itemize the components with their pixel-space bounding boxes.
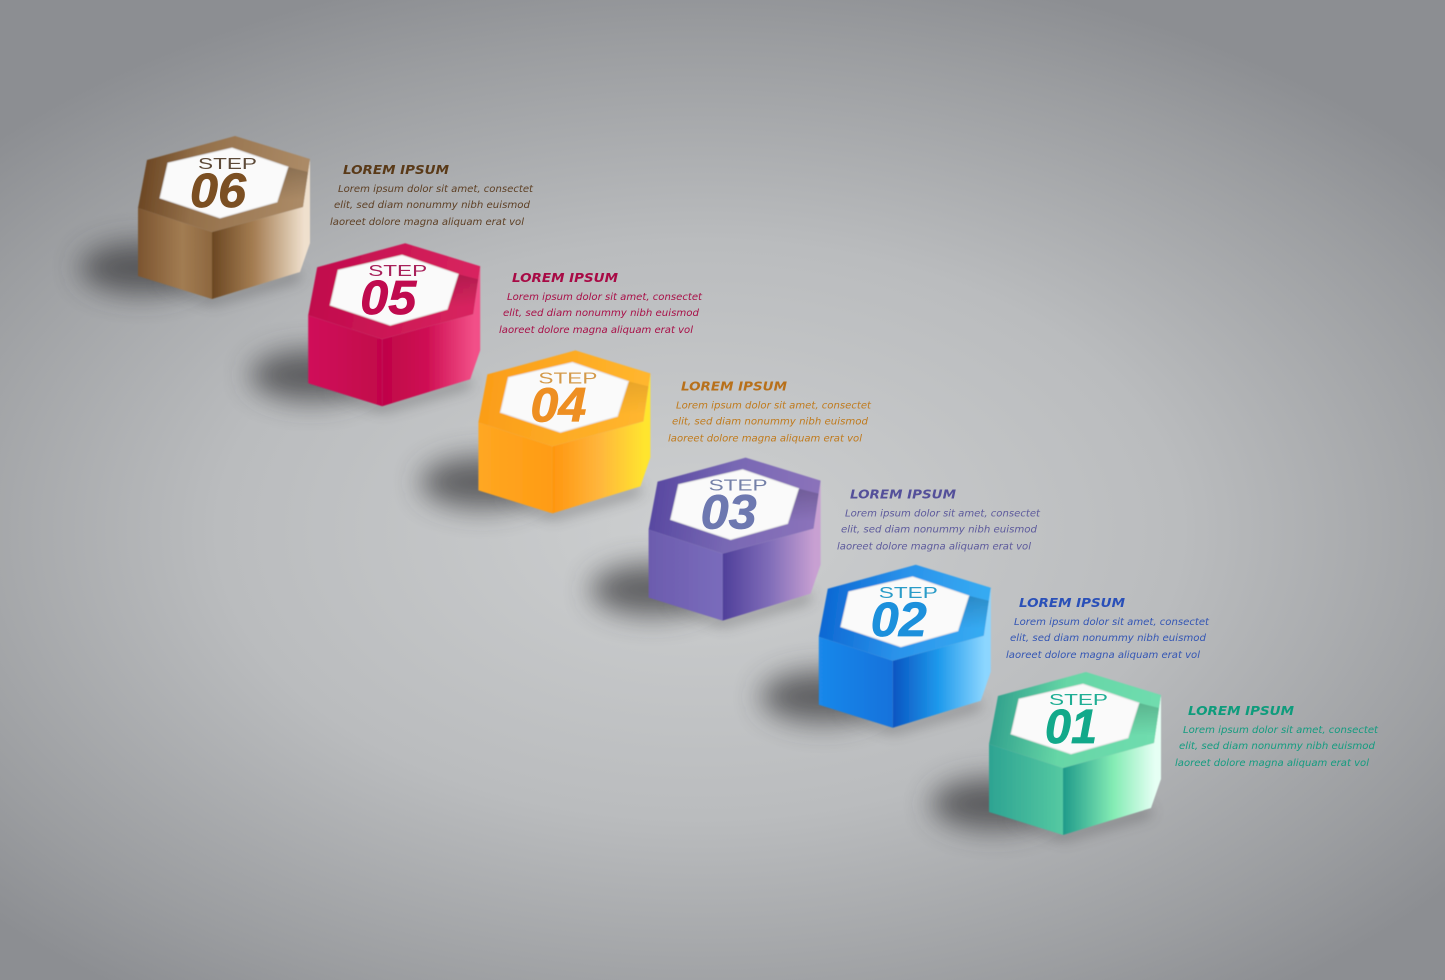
body copy: laoreet dolore magna aliquam erat vol [1175,758,1369,769]
step word: STEP [368,263,427,280]
body copy [668,400,872,444]
step number: 01 [1045,701,1097,754]
body copy [1175,725,1379,769]
left face [138,208,212,299]
white label hexagon [671,470,799,540]
text block: step 03 [837,487,1041,553]
left face [478,422,552,513]
body copy: Lorem ipsum dolor sit amet, consectet [676,400,872,411]
step word: STEP [879,585,938,602]
body copy: Lorem ipsum dolor sit amet, consectet [507,292,703,303]
step word: STEP [538,370,597,387]
heading: LOREM IPSUM [512,270,619,285]
step number: 03 [701,487,757,540]
body copy: laoreet dolore magna aliquam erat vol [837,542,1031,553]
body copy: laoreet dolore magna aliquam erat vol [668,433,862,444]
heading: LOREM IPSUM [850,487,957,502]
top shading [617,381,648,421]
panel: step 06 hexagon block [80,136,310,305]
panel: step 04 hexagon block [420,350,650,519]
top shading [277,167,308,207]
top face [478,350,650,446]
heading: LOREM IPSUM [1019,595,1126,610]
body copy [499,292,703,336]
left face [819,637,893,728]
panel: step 01 hexagon block [931,672,1161,841]
body copy [330,184,534,228]
top face [308,243,480,339]
top shading [958,596,989,636]
right face [212,159,310,299]
heading: LOREM IPSUM [681,378,788,393]
step word: STEP [198,156,257,173]
text block: step 04 [668,378,872,444]
body copy: elit, sed diam nonummy nibh euismod [503,308,700,319]
text block: step 02 [1006,595,1210,661]
step number: 06 [190,165,246,218]
body copy: elit, sed diam nonummy nibh euismod [1010,633,1207,644]
step word: STEP [1049,692,1108,709]
panel: step 05 hexagon block [250,243,480,412]
left face [308,315,382,406]
body copy: elit, sed diam nonummy nibh euismod [841,525,1038,536]
top face [989,672,1161,768]
body copy: elit, sed diam nonummy nibh euismod [334,200,531,211]
body copy [837,509,1041,553]
step word: STEP [709,478,768,495]
body copy: Lorem ipsum dolor sit amet, consectet [845,509,1041,520]
right face [552,373,650,513]
step number: 04 [530,379,586,432]
white label hexagon [160,148,288,218]
right face [723,481,821,621]
text block: step 05 [499,270,703,336]
body copy: Lorem ipsum dolor sit amet, consectet [1014,617,1210,628]
right face [1063,695,1161,835]
body copy: Lorem ipsum dolor sit amet, consectet [1183,725,1379,736]
top face [649,458,821,554]
body copy: laoreet dolore magna aliquam erat vol [499,325,693,336]
top face [819,565,991,661]
step number: 05 [360,272,418,325]
heading: LOREM IPSUM [1188,703,1295,718]
white label hexagon [500,362,628,432]
top face [138,136,310,232]
top shading [788,489,819,529]
body copy: laoreet dolore magna aliquam erat vol [1006,650,1200,661]
white label hexagon [1011,684,1139,754]
body copy: laoreet dolore magna aliquam erat vol [330,217,524,228]
body copy: Lorem ipsum dolor sit amet, consectet [338,184,534,195]
top shading [1128,703,1159,743]
text block: step 06 [330,162,534,228]
white label hexagon [841,577,969,647]
left face [989,744,1063,835]
right face [893,588,991,728]
body copy [1006,617,1210,661]
white label hexagon [330,255,458,325]
body copy: elit, sed diam nonummy nibh euismod [672,416,869,427]
text block: step 01 [1175,703,1379,769]
step number: 02 [871,594,927,647]
right face [382,266,480,406]
body copy: elit, sed diam nonummy nibh euismod [1179,741,1376,752]
panel: step 02 hexagon block [761,565,991,734]
panel: step 03 hexagon block [591,458,821,627]
left face [649,530,723,621]
top shading [447,274,478,314]
heading: LOREM IPSUM [343,162,450,177]
